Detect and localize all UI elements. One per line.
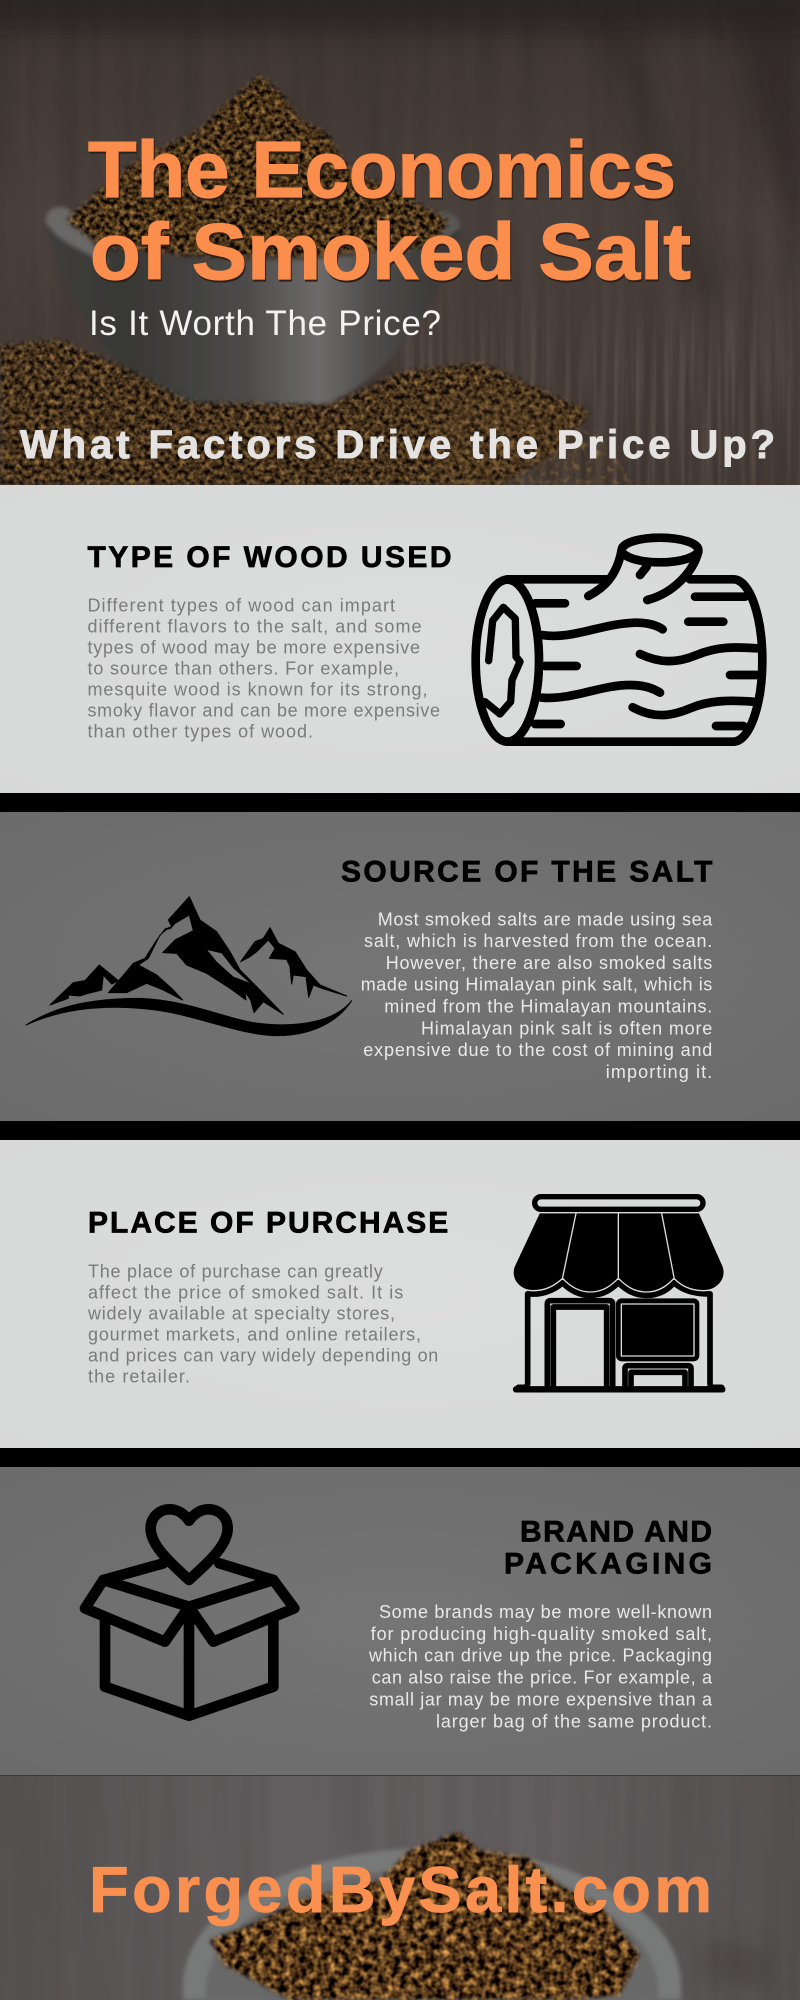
icon: storefront — [513, 1197, 724, 1389]
panel: place of purchase — [0, 1140, 800, 1448]
footer website: ForgedBySalt.com — [89, 1853, 712, 1926]
text block: type of wood: mesquite wood is known for its strong, — [88, 680, 428, 700]
heading: brand and packaging — [504, 1516, 712, 1580]
text block: brand and packaging: larger bag of the same product. — [436, 1711, 712, 1731]
heading: place of purchase: PLACE OF PURCHASE — [88, 1207, 448, 1240]
panel: brand and packaging — [0, 1467, 800, 1775]
text block: brand and packaging: Some brands may be more well-known — [379, 1602, 712, 1622]
hero photo: smoked salt in bowl — [0, 0, 800, 485]
heading: brand and packaging: BRAND AND — [520, 1516, 712, 1549]
heading: type of wood: TYPE OF WOOD USED — [88, 541, 452, 574]
panel: type of wood used — [0, 485, 800, 793]
text block: place of purchase: affect the price of smoked salt. It is — [88, 1282, 403, 1302]
text block: brand and packaging: which can drive up the price. Packaging — [368, 1646, 712, 1666]
text block: place of purchase: the retailer. — [88, 1366, 190, 1386]
text block: place of purchase: and prices can vary widely depending on — [88, 1345, 438, 1365]
text block: source of the salt: However, there are also smoked salts — [386, 953, 712, 973]
text block: source of the salt: Himalayan pink salt is often more — [421, 1018, 712, 1038]
text block: place of purchase: gourmet markets, and online retailers, — [88, 1324, 421, 1344]
panel: footer — [0, 1775, 800, 2000]
text block: type of wood: smoky flavor and can be more expensive — [88, 701, 440, 721]
title: The Economics — [88, 125, 676, 214]
heading: brand and packaging: PACKAGING — [504, 1547, 712, 1580]
text block: type of wood: Different types of wood can impart — [88, 596, 395, 616]
section heading: What Factors Drive the Price Up? — [20, 423, 775, 467]
text block: brand and packaging — [368, 1602, 713, 1731]
text block: type of wood: than other types of wood. — [88, 722, 313, 742]
text block: source of the salt: salt, which is harvested from the ocean. — [364, 931, 712, 951]
title — [88, 125, 691, 296]
footer photo: salt bowl — [0, 1775, 800, 2000]
text block: source of the salt: made using Himalayan pink salt, which is — [361, 975, 712, 995]
text block: source of the salt: importing it. — [606, 1062, 712, 1082]
text block: source of the salt — [361, 909, 713, 1082]
subtitle: Is It Worth The Price? — [89, 304, 441, 343]
heading: source of the salt: SOURCE OF THE SALT — [341, 855, 712, 888]
text block: source of the salt: mined from the Himalayan mountains. — [384, 996, 712, 1016]
icon: gift box with heart — [85, 1509, 294, 1716]
text block: type of wood: different flavors to the salt, and some — [88, 617, 422, 637]
text block: source of the salt: Most smoked salts are made using sea — [378, 909, 713, 929]
icon: mountains — [26, 897, 352, 1036]
text block: type of wood — [88, 596, 440, 742]
panel: hero — [0, 0, 800, 485]
text block: type of wood: to source than others. For example, — [88, 659, 399, 679]
title: of Smoked Salt — [90, 207, 691, 296]
text block: place of purchase: widely available at specialty stores, — [87, 1303, 395, 1323]
panel: source of the salt — [0, 812, 800, 1121]
text block: source of the salt: expensive due to the cost of mining and — [363, 1040, 712, 1060]
text block: type of wood: types of wood may be more expensive — [88, 638, 420, 658]
text block: brand and packaging: for producing high-quality smoked salt, — [371, 1624, 712, 1644]
text block: place of purchase: The place of purchase can greatly — [88, 1261, 383, 1281]
text block: brand and packaging: can also raise the price. For example, a — [372, 1667, 713, 1687]
icon: wood log — [476, 538, 762, 742]
text block: place of purchase — [87, 1261, 438, 1386]
text block: brand and packaging: small jar may be more expensive than a — [369, 1689, 713, 1709]
